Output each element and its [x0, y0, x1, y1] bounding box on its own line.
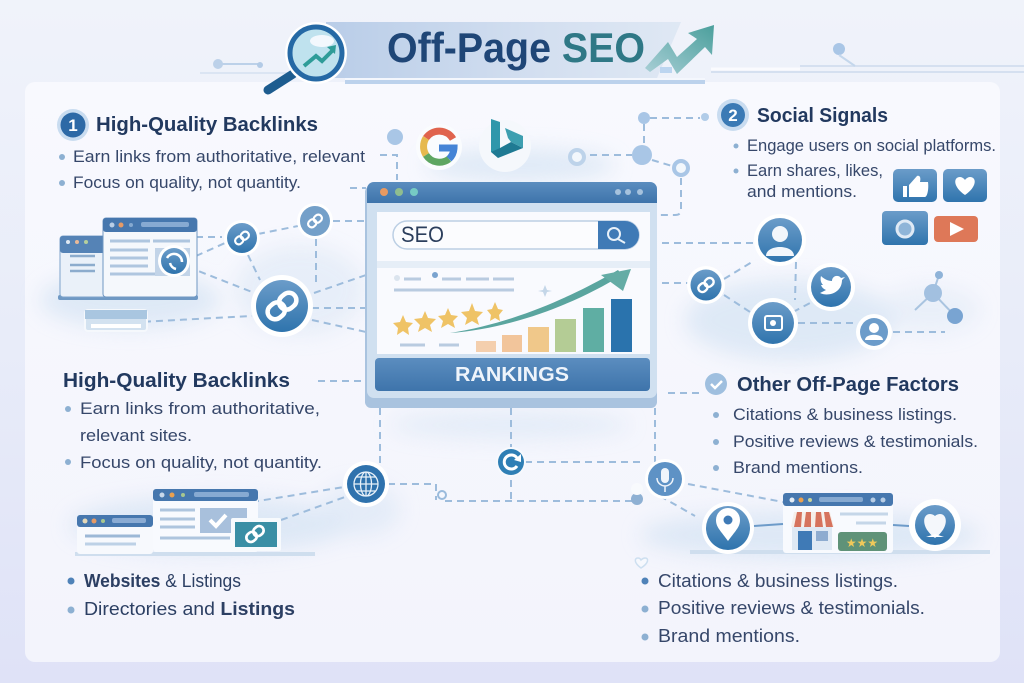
bullet list: Engage users on social platforms. — [747, 136, 996, 155]
icon: link badge small — [297, 203, 333, 239]
bullet list — [734, 136, 996, 201]
icon: refresh badge — [496, 447, 526, 477]
rankings bar: RANKINGS — [455, 364, 569, 386]
search bar: SEO — [401, 222, 444, 247]
section 1: high-quality backlinks — [57, 109, 365, 192]
search engine logos — [416, 119, 531, 172]
store awning — [791, 512, 834, 527]
icon: magnifying glass — [268, 22, 347, 90]
icon: heart — [943, 169, 987, 202]
heading: Other Off-Page Factors — [737, 374, 959, 396]
icon: twitter bird badge — [807, 263, 855, 311]
bullet list: Earn shares, likes, — [747, 161, 883, 180]
decorative node top right — [833, 43, 855, 66]
rating stars — [393, 302, 503, 335]
icon: large link badge — [251, 275, 313, 337]
bullet list: relevant sites. — [80, 426, 192, 445]
bottom left list — [68, 571, 295, 619]
search bar — [393, 221, 639, 249]
illustration: linked web pages — [58, 203, 333, 337]
browser title bar — [367, 182, 657, 203]
sparkle — [538, 285, 552, 297]
bullet list: Brand mentions. — [733, 458, 863, 477]
connector right of title — [711, 66, 1024, 72]
icon: link badge — [687, 266, 725, 304]
bullet list — [65, 399, 322, 472]
heading: High-Quality Backlinks — [63, 370, 290, 392]
bar chart — [476, 299, 632, 352]
icon: Bing logo — [479, 119, 531, 172]
bullet list: Earn links from authoritative, relevant — [73, 147, 365, 166]
social network badges — [687, 214, 963, 350]
rankings bar — [375, 358, 650, 391]
bottom right list: Citations & business listings. — [658, 571, 898, 591]
front browser window — [103, 218, 197, 297]
icon: small user badge — [856, 314, 892, 350]
bottom right list — [642, 571, 925, 646]
heading: Social Signals — [757, 105, 888, 127]
bottom left list: Websites & Listings — [84, 571, 241, 591]
icon: globe badge — [343, 461, 389, 507]
icon: microphone badge — [645, 459, 685, 499]
link card — [231, 518, 281, 551]
molecule nodes — [915, 271, 963, 324]
icon: link badge — [224, 220, 260, 256]
connector solid lines — [754, 524, 909, 526]
icon: check badge — [705, 373, 727, 395]
connector node — [631, 483, 643, 505]
front browser window — [153, 489, 258, 552]
back browser window — [60, 236, 120, 297]
icon: growth arrow — [645, 25, 714, 74]
store browser window — [783, 493, 893, 553]
social reaction icons — [882, 169, 987, 245]
icon: camera — [882, 211, 928, 245]
number badge 1 — [57, 109, 89, 141]
bullet list: Focus on quality, not quantity. — [80, 453, 322, 472]
growth arrow — [450, 269, 631, 333]
connector node — [438, 491, 446, 499]
bottom right list: Positive reviews & testimonials. — [658, 598, 925, 618]
section 2: social signals — [717, 99, 996, 201]
bottom right list: Brand mentions. — [658, 626, 800, 646]
illustration: websites and listings — [75, 461, 389, 556]
network connector lines — [120, 118, 945, 520]
icon: user badge — [754, 214, 806, 266]
section: high-quality backlinks 2 — [63, 370, 322, 472]
title banner — [200, 22, 1024, 90]
title text: Off-Page SEO — [387, 24, 645, 71]
decorative heart — [635, 558, 648, 568]
bullet list — [713, 405, 978, 477]
illustration: local business — [631, 459, 990, 554]
bullet list: Citations & business listings. — [733, 405, 957, 424]
background watercolor washes — [40, 149, 980, 559]
central browser window: rankings — [365, 182, 657, 408]
bullet list: Positive reviews & testimonials. — [733, 432, 978, 451]
icon: map pin badge — [702, 502, 754, 554]
bullet list: Focus on quality, not quantity. — [73, 173, 301, 192]
bullet list: and mentions. — [747, 182, 857, 201]
section: other off-page factors — [705, 373, 978, 477]
number badge 2: 2 — [728, 106, 738, 125]
rating sign: ★★★ — [846, 536, 878, 550]
icon: globe refresh badge — [158, 245, 190, 277]
store front — [792, 527, 832, 550]
icon: thumbs up — [893, 169, 937, 202]
network nodes top centre — [387, 112, 709, 175]
placeholder result lines — [394, 272, 514, 345]
icon: photo badge — [748, 298, 798, 348]
bullet list: Earn links from authoritative, — [80, 399, 320, 418]
back browser window — [77, 515, 153, 554]
icon: speech heart badge — [909, 499, 961, 551]
icon: video play — [934, 216, 978, 242]
connector left of title — [213, 59, 263, 69]
number badge 1: 1 — [68, 116, 78, 135]
icon: Google G — [416, 124, 462, 170]
bullet list — [59, 147, 365, 192]
heading: High-Quality Backlinks — [96, 114, 318, 136]
number badge 2 — [717, 99, 749, 131]
content area — [377, 212, 650, 354]
small card — [85, 310, 147, 331]
bottom left list: Directories and Listings — [84, 599, 295, 619]
